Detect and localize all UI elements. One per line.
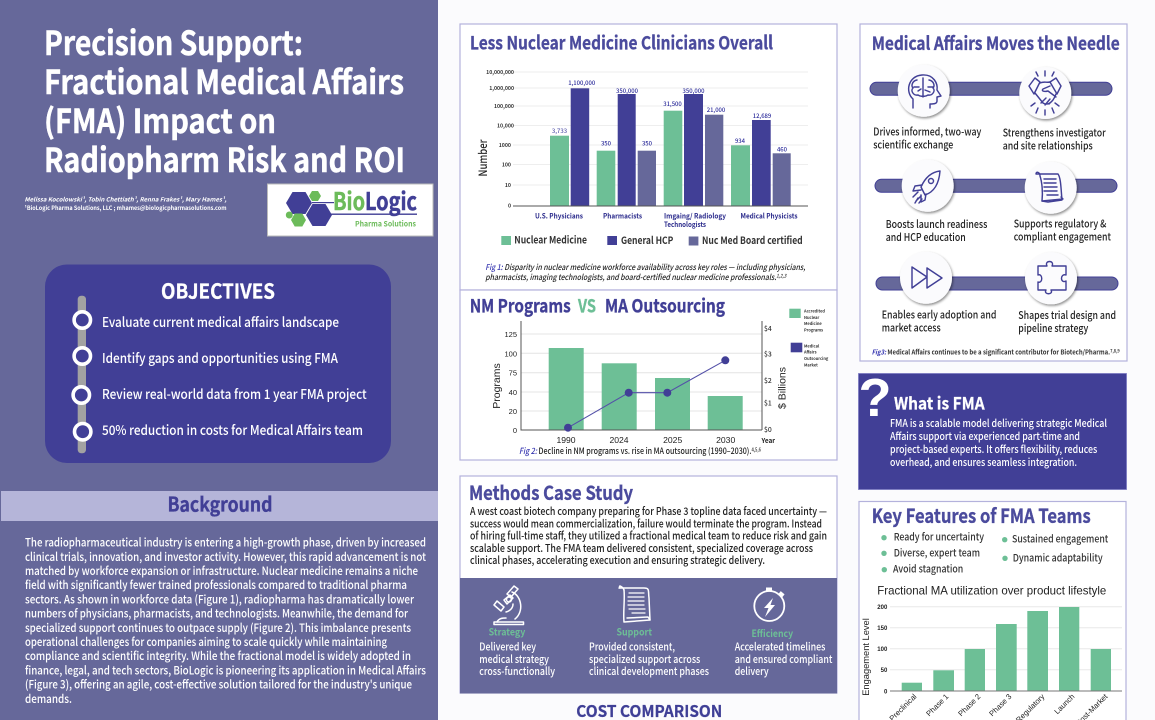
bar chart: engagement: Engagement Level [861,618,871,696]
icon: regulatory scroll [1025,162,1077,214]
heading: what is FMA: What is FMA [894,390,985,414]
bar chart: workforce: 1,000,000 [489,85,514,92]
icon: stopwatch [754,588,785,621]
bar chart: workforce: 1000 [499,142,511,149]
icon: scroll [619,586,650,622]
bar chart: workforce: Number [475,139,491,176]
panel: what is FMA [858,368,1126,490]
background text: field with significantly fewer trained professionals compared to traditional pharma [25,577,407,593]
background text: matched by workforce expansion or infrastructure. Nuclear medicine remains a niche [25,563,418,579]
chart legend: Affairs [803,349,817,356]
chart legend: Market [804,362,818,368]
objectives list: Identify gaps and opportunities using FMA [102,348,339,367]
bar chart: engagement: 150 [877,626,888,632]
chart legend: Nuclear Medicine [514,232,587,247]
panel: methods case study [460,476,837,694]
figure 1 caption: 1,2,3 [776,272,787,280]
connector bars [870,82,1118,290]
efficiency text: and ensured compliant [735,652,833,667]
heading: methods case study: Methods Case Study [469,477,633,506]
efficiency text: delivery [735,664,769,679]
chart legend: Medicine [804,320,822,327]
logo: BioLogic: Pharma Solutions [355,219,416,230]
bar chart: workforce: 3,733 [552,126,568,135]
label: early adoption: Enables early adoption and [882,306,996,322]
FMA description: project-based experts. It offers flexibility, reduces [890,441,1097,456]
chart legend: Medical [804,342,820,350]
icon: handshake [1019,67,1071,119]
objectives list [102,312,367,439]
label: scientific exchange [873,124,981,153]
strategy text: Strategy [489,624,526,638]
background text: compliance and scientific integrity. While the fractional model is widely adopted in [25,648,411,664]
bar chart: workforce: Medical Physicists [740,212,798,222]
background text: numbers of physicians, pharmacists, and technologists. Meanwhile, the demand for [25,606,408,622]
label: regulatory engagement: Supports regulatory & [1014,215,1107,231]
objectives timeline [73,296,91,453]
panel: objectives [45,264,391,463]
title: (FMA) Impact on [44,95,276,143]
objectives list: Review real-world data from 1 year FMA project [102,384,367,403]
support text: Support [616,624,652,638]
icon: question mark: ? [858,368,892,428]
heading: background: Background [168,488,272,518]
combo chart: programs and market: 0 [513,426,517,435]
bar chart: workforce: 10,000,000 [486,69,514,76]
background text: specialized support continues to outpace supply (Figure 2). This imbalance presents [25,620,411,636]
bar chart: workforce: 350,000 [683,86,705,95]
icon: puzzle piece [1025,252,1077,304]
FMA description: Affairs support via experienced part-time and [890,428,1080,443]
bar chart: workforce: 10,000 [497,122,514,130]
background text: operational challenges for companies aiming to scale quickly while maintaining [25,634,387,650]
combo chart: programs and market: 2025 [663,435,682,445]
figure 2 caption: 4,5,6 [751,446,761,454]
heading: NM programs vs MA outsourcing: NM Programs [470,292,571,318]
bar chart: engagement: Phase 1 [924,692,950,718]
label: regulatory engagement [1014,215,1112,245]
chart legend: Programs [804,328,823,334]
methods text: clinical phases, accelerating execution and ensuring strategic delivery. [470,553,765,568]
chart legend: General HCP [621,232,673,247]
bar chart: workforce [475,69,808,230]
bar chart: workforce: 31,500 [663,99,682,108]
heading: NM programs vs MA outsourcing [470,292,725,318]
feature list: Dynamic adaptability [1013,549,1103,564]
bar chart: workforce: 350 [601,138,612,148]
FMA description [890,415,1107,469]
methods text: scalable support. The FMA team delivered consistent, specialized coverage across [470,541,813,556]
label: investigator relationships [1003,125,1106,154]
panel: NM programs vs MA outsourcing [460,290,837,460]
chart legend: Nuclear [804,315,820,321]
label: trial design: pipeline strategy [1018,320,1088,336]
bar chart: workforce: 350 [642,138,653,148]
heading: key features: Key Features of FMA Teams [872,500,1091,529]
bar chart: workforce: Technologists [664,220,706,230]
chart legend: Nuc Med Board certified [702,232,803,247]
background text: The radiopharmaceutical industry is entering a high-growth phase, driven by increased [25,534,426,550]
objectives list: 50% reduction in costs for Medical Affairs team [102,420,363,439]
bar chart: workforce: Imgaing/ Radiology [664,212,727,222]
logo: BioLogic: BioLogic [333,182,417,217]
efficiency text: Accelerated timelines [735,640,825,655]
support text: specialized support across [589,652,700,667]
label: trial design [1018,307,1116,336]
combo chart: programs and market: $0 [764,424,772,434]
panel: left sidebar [0,0,438,720]
logo: BioLogic [268,182,433,236]
objectives list: Evaluate current medical affairs landscape [102,312,339,331]
bar chart: workforce: U.S. Physicians [535,212,583,222]
background text: (Figure 3), offering an agile, cost-effective solution tailored for the industry's unique [25,677,412,693]
label: early adoption [882,306,996,335]
label: regulatory engagement: compliant engagement [1014,229,1112,245]
background text [25,534,426,707]
combo chart: programs and market: 125 [504,330,517,339]
bar chart: workforce: 10 [505,182,511,189]
strategy text [479,624,555,679]
methods text: of hiring full-time staff, they utilized a fractional medical team to reduce risk and gain [470,529,827,544]
chart legend [501,232,803,247]
authors: ¹BioLogic Pharma Solutions, LLC ; mhames@biologicpharmasolutions.com [24,203,227,212]
bar chart: workforce: 100 [502,162,511,168]
background text: clinical trials, innovation, and investor activity. However, this rapid advancement is not [25,549,426,565]
strategy text: medical strategy [479,652,549,667]
authors: Melissa Kocolowski¹, Tobin Chettiath¹, Renna Frakes¹, Mary Hames¹, [24,195,227,204]
panel: less nuclear medicine clinicians [460,24,837,290]
bar chart: workforce: 460 [777,144,788,154]
strategy text: cross-functionally [479,664,555,679]
methods text [470,504,827,568]
bar chart: workforce: 350,000 [616,86,639,95]
heading: less nuclear medicine clinicians: Less Nuclear Medicine Clinicians Overall [470,30,773,56]
label: scientific exchange: scientific exchange [873,137,953,153]
background text: finance, legal, and tech sectors, BioLogic is pioneering its application in Medical Affairs [25,662,426,678]
combo chart: programs and market: 100 [504,349,517,358]
methods text: success would mean commercialization, failure would terminate the program. Instead [470,516,822,532]
label: launch readiness: Boosts launch readiness [886,216,987,232]
label: early adoption: market access [882,319,941,335]
label: trial design: Shapes trial design and [1018,307,1116,323]
support text: Provided consistent, [589,640,675,655]
label: investigator relationships: Strengthens investigator [1003,125,1106,141]
combo chart: programs and market: $2 [764,375,772,385]
combo chart: programs and market: 1990 [556,435,576,445]
bar chart: workforce: 0 [508,202,511,210]
label: investigator relationships: and site relationships [1003,138,1093,154]
title: Fractional Medical Affairs [44,56,404,104]
figure 2 caption: Fig 2: Decline in NM programs vs. rise in MA outsourcing (1990–2030). [519,445,796,457]
combo chart: programs and market: 75 [509,369,517,378]
FMA description: overhead, and ensures seamless integration. [890,454,1077,469]
figure 1 caption [485,262,806,283]
figure 3 caption: 7,8,9 [1110,348,1120,354]
feature list: Sustained engagement [1012,531,1108,546]
bar chart: workforce: 12,689 [753,111,772,120]
support text: clinical development phases [589,664,709,679]
bar chart: engagement: 200 [877,605,888,611]
chart legend: Accredited [803,308,825,314]
icon: rocket [902,160,954,212]
combo chart: programs and market: 20 [509,407,517,416]
strategy text: Delivered key [479,640,536,655]
combo chart: programs and market: $1 [764,398,772,408]
figure 1 caption: Fig 1: Disparity in nuclear medicine workforce availability across key roles — including physicians, [485,262,806,273]
feature list [881,529,1108,576]
icon: fast forward [900,252,952,304]
bar chart: engagement: Phase 2 [956,692,982,718]
panel: key features of FMA teams [859,500,1126,720]
bar chart: workforce: 1,100,000 [568,78,596,87]
objectives heading: OBJECTIVES [161,276,275,304]
title: Radiopharm Risk and ROI [44,134,405,182]
bar chart: workforce: 934 [735,136,746,145]
authors [24,195,227,212]
bar chart: workforce: 21,000 [707,105,726,114]
icon: microscope [494,586,524,624]
title: Precision Support: [44,17,303,65]
efficiency text [735,626,833,679]
panel: medical affairs moves the needle [860,24,1127,361]
title [44,17,405,182]
feature list: Ready for uncertainty [894,529,984,544]
figure 1 caption: pharmacists, imaging technologists, and board-certified nuclear medicine professionals. [485,272,822,283]
panel: case study outcomes [460,578,837,694]
bar chart: engagement: 100 [877,647,888,653]
combo chart: programs and market: $ Billions [776,367,788,409]
combo chart: programs and market: 40 [509,388,517,397]
icon: brain [898,65,950,117]
heading: NM programs vs MA outsourcing: VS [577,292,596,318]
label: launch readiness: and HCP education [886,229,966,245]
background text: sectors. As shown in workforce data (Figure 1), radiopharma has dramatically lower [25,591,414,607]
combo chart: programs and market: $3 [764,348,772,358]
chart legend [789,308,829,368]
combo chart: programs and market [491,321,788,445]
heading: background [1,488,438,521]
support text [589,624,709,679]
feature list: Diverse, expert team [894,545,980,560]
chart title: Fractional MA utilization over product lifestyle [877,584,1106,597]
background text: demands. [25,691,72,707]
combo chart: programs and market: Year [760,436,775,445]
combo chart: programs and market: 2030 [716,435,735,445]
bar chart: engagement: 0 [884,690,888,696]
feature list: Avoid stagnation [893,561,963,576]
bar chart: workforce: Pharmacists [603,212,642,222]
heading: NM programs vs MA outsourcing: MA Outsourcing [605,292,725,318]
methods text: A west coast biotech company preparing for Phase 3 topline data faced uncertainty — [470,504,827,519]
combo chart: programs and market: 2024 [609,435,629,445]
combo chart: programs and market: $4 [764,323,772,333]
chart legend: Outsourcing [804,355,829,362]
label: scientific exchange: Drives informed, two-way [873,124,981,140]
FMA description: FMA is a scalable model delivering strategic Medical [890,415,1107,430]
label: launch readiness [886,216,987,245]
combo chart: programs and market: Programs [491,363,503,409]
efficiency text: Efficiency [751,626,794,640]
bar chart: engagement: Launch [1052,692,1076,716]
bar chart: engagement: 50 [881,668,888,674]
figure 3 caption: Fig3: Medical Affairs continues to be a significant contributor for Biotech/Pharma. [872,346,1141,356]
bar chart: workforce: 100,000 [494,103,514,110]
bar chart: engagement: Phase 3 [987,692,1013,718]
bar chart: engagement [861,605,1122,720]
